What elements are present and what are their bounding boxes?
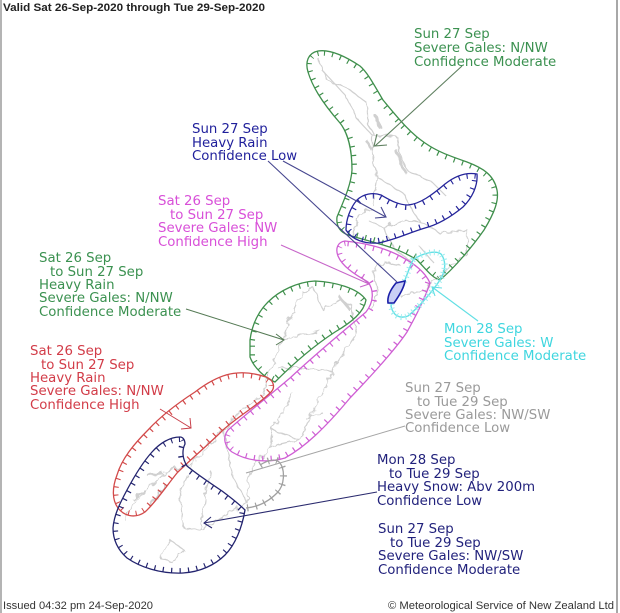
arrow: magenta label to central band bbox=[281, 245, 369, 287]
label: Sat 26 to Sun 27 Sep severe gales NW: Confidence High bbox=[158, 235, 268, 250]
warning area: Sun 27 Sep heavy rain, small Wellington area (blue) bbox=[388, 281, 405, 303]
label: Mon 28 to Tue 29 Sep heavy snow: Heavy Snow: Abv 200m bbox=[377, 480, 535, 495]
label: Mon 28 Sep severe gales W: Mon 28 Sep bbox=[444, 322, 522, 337]
label: Sun 27 Sep severe gales N/NW: Severe Gales: N/NW bbox=[414, 41, 548, 56]
label: Sun 27 to Tue 29 Sep severe gales NW/SW: to Tue 29 Sep bbox=[417, 395, 508, 410]
label: Mon 28 to Tue 29 Sep heavy snow: Mon 28 Sep bbox=[377, 453, 455, 468]
arrow: green gales label to northern North Island bbox=[374, 66, 462, 146]
arrow: grey label to eastern South Island bbox=[246, 426, 405, 473]
label: Sun 27 to Tue 29 Sep severe gales moderate: Confidence Moderate bbox=[378, 563, 520, 578]
warning area: Sat 26 to Sun 27 Sep rain and gales, northwest South Island (green) bbox=[250, 281, 366, 382]
footer: copyright: © Meteorological Service of New Zealand Ltd bbox=[388, 600, 614, 612]
label: Sun 27 to Tue 29 Sep severe gales moderate: to Tue 29 Sep bbox=[390, 536, 481, 551]
map: New Zealand outline bbox=[125, 58, 467, 562]
label: Sat 26 to Sun 27 Sep rain and gales moderate: to Sun 27 Sep bbox=[50, 265, 143, 280]
warning area: snow and gales, southern South Island (navy) bbox=[113, 437, 245, 573]
label: Sun 27 Sep severe gales N/NW: Sun 27 Sep bbox=[414, 27, 490, 42]
warning area: Sun 27 to Tue 29 Sep gales (grey) bbox=[246, 460, 283, 508]
label: Sun 27 Sep severe gales N/NW: Confidence Moderate bbox=[414, 55, 556, 70]
label: Sun 27 Sep heavy rain: Confidence Low bbox=[192, 149, 297, 164]
warning area: Sat 26 to Sun 27 Sep gales, central band (magenta) bbox=[225, 241, 430, 461]
label: Sun 27 Sep heavy rain: Heavy Rain bbox=[192, 136, 268, 151]
label: Sat 26 to Sun 27 Sep severe gales NW: Severe Gales: NW bbox=[158, 221, 277, 236]
label: Sat 26 to Sun 27 Sep severe gales NW: to Sun 27 Sep bbox=[170, 208, 263, 223]
warning area: Sun 27 Sep gales, northern North Island (green) bbox=[307, 51, 497, 280]
label: Sat 26 to Sun 27 Sep rain and gales high: Heavy Rain bbox=[30, 371, 106, 386]
arrow: heavy rain label to two blue areas bbox=[268, 161, 397, 282]
label: Sat 26 to Sun 27 Sep rain and gales high: to Sun 27 Sep bbox=[41, 358, 134, 373]
label: Sat 26 to Sun 27 Sep rain and gales high: Severe Gales: N/NW bbox=[30, 384, 164, 399]
map: South Island bbox=[125, 287, 357, 562]
label: Mon 28 Sep severe gales W: Confidence Moderate bbox=[444, 349, 586, 364]
label: Sat 26 to Sun 27 Sep rain and gales moderate: Confidence Moderate bbox=[39, 305, 181, 320]
label: Sun 27 to Tue 29 Sep severe gales moderate: Severe Gales: NW/SW bbox=[378, 549, 523, 564]
label: Sat 26 to Sun 27 Sep rain and gales moderate: Sat 26 Sep bbox=[39, 251, 111, 266]
label: Sat 26 to Sun 27 Sep rain and gales high: Confidence High bbox=[30, 398, 140, 413]
warning area: Sat 26 to Sun 27 Sep rain and gales, Westland (red) bbox=[113, 373, 273, 516]
label: Sat 26 to Sun 27 Sep rain and gales high: Sat 26 Sep bbox=[30, 344, 102, 359]
header: validity period: Valid Sat 26-Sep-2020 through Tue 29-Sep-2020 bbox=[3, 2, 265, 14]
label: Sat 26 to Sun 27 Sep rain and gales moderate: Severe Gales: N/NW bbox=[39, 291, 173, 306]
warning area: Sun 27 Sep heavy rain, Bay of Plenty (blue) bbox=[346, 173, 477, 243]
warning area: Mon 28 Sep gales, Cook Strait (cyan) bbox=[391, 252, 445, 317]
label: Mon 28 to Tue 29 Sep heavy snow: to Tue 29 Sep bbox=[389, 467, 480, 482]
arrow: green label to northwest South Island bbox=[186, 309, 284, 345]
label: Mon 28 Sep severe gales W: Severe Gales: W bbox=[444, 336, 553, 351]
map: North Island bbox=[318, 58, 467, 310]
arrow: snow label to southern South Island bbox=[204, 492, 377, 528]
arrow: cyan label to Cook Strait bbox=[432, 287, 478, 321]
label: Sun 27 to Tue 29 Sep severe gales NW/SW: Confidence Low bbox=[405, 421, 510, 436]
label: Sun 27 to Tue 29 Sep severe gales NW/SW: Severe Gales: NW/SW bbox=[405, 408, 550, 423]
label: Sat 26 to Sun 27 Sep severe gales NW: Sat 26 Sep bbox=[158, 194, 230, 209]
arrow: red label to Westland bbox=[160, 409, 191, 429]
label: Sat 26 to Sun 27 Sep rain and gales moderate: Heavy Rain bbox=[39, 278, 115, 293]
label: Sun 27 to Tue 29 Sep severe gales moderate: Sun 27 Sep bbox=[378, 522, 454, 537]
footer: issue time: Issued 04:32 pm 24-Sep-2020 bbox=[3, 600, 153, 612]
label: Mon 28 to Tue 29 Sep heavy snow: Confidence Low bbox=[377, 494, 482, 509]
label: Sun 27 to Tue 29 Sep severe gales NW/SW: Sun 27 Sep bbox=[405, 381, 481, 396]
label: Sun 27 Sep heavy rain: Sun 27 Sep bbox=[192, 122, 268, 137]
